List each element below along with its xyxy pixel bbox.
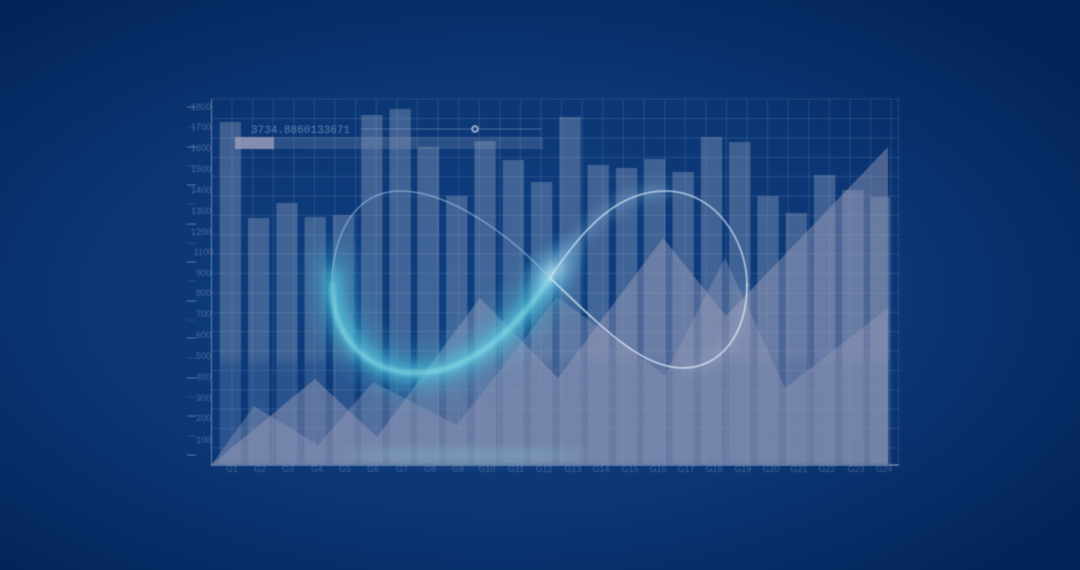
slider line (361, 128, 542, 130)
x axis labels (226, 464, 893, 474)
curve: lower right (550, 278, 747, 368)
y axis labels: 1800 (191, 102, 211, 112)
curve: upper left (332, 191, 550, 285)
x axis labels: G7 (396, 464, 408, 474)
y axis labels: 1200 (191, 227, 211, 237)
x axis labels: G3 (282, 464, 294, 474)
x axis labels: G12 (535, 464, 553, 474)
bar chart (220, 109, 890, 464)
curve: upper right (550, 191, 747, 285)
y axis labels: 600 (196, 330, 211, 340)
y axis labels: 900 (196, 268, 211, 278)
x axis labels: G5 (339, 464, 351, 474)
y axis labels: 300 (196, 393, 211, 403)
y axis labels: 1400 (191, 185, 211, 195)
x axis labels: G18 (705, 464, 723, 474)
area chart: back layer (212, 258, 888, 464)
x axis labels: G8 (424, 464, 436, 474)
y axis labels: 1100 (194, 247, 213, 257)
glow: crossing (502, 217, 604, 327)
y axis labels (191, 102, 213, 445)
glow: bottom right (683, 285, 747, 368)
y axis labels: 800 (196, 288, 211, 298)
glow: left lobe wide (334, 265, 550, 373)
x axis labels: G21 (790, 464, 808, 474)
y axis labels: 100 (196, 435, 211, 445)
y axis labels: 1500 (191, 164, 211, 174)
x axis labels: G2 (254, 464, 266, 474)
x axis labels: G6 (367, 464, 379, 474)
x axis labels: G20 (762, 464, 780, 474)
y axis ticks (187, 107, 196, 455)
value text: 3734.8860133671 (251, 125, 350, 137)
x axis labels: G10 (478, 464, 496, 474)
y axis labels: 700 (196, 309, 211, 319)
x axis labels: G1 (226, 464, 238, 474)
glow: left lobe bright (333, 275, 552, 373)
x axis labels: G4 (311, 464, 323, 474)
y axis labels: 200 (196, 413, 211, 423)
curve: lower left (332, 278, 550, 373)
area chart: front layer (212, 147, 888, 464)
x axis labels: G14 (592, 464, 610, 474)
chart grid (211, 99, 899, 465)
y axis labels: 1600 (191, 143, 211, 153)
x axis labels: G13 (564, 464, 582, 474)
x axis labels: G15 (621, 464, 639, 474)
progress fill (235, 137, 274, 149)
x axis labels: G24 (875, 464, 893, 474)
floor glow (340, 448, 590, 462)
y axis labels: 500 (196, 351, 211, 361)
slider readout (235, 125, 543, 149)
y axis labels: 400 (196, 372, 211, 382)
slider knob (472, 126, 478, 132)
chart (187, 99, 899, 474)
infinity symbol (332, 191, 747, 373)
x axis labels: G16 (649, 464, 667, 474)
axis lines (211, 99, 899, 465)
progress track (235, 137, 543, 149)
x axis labels: G11 (508, 464, 524, 474)
x axis labels: G17 (677, 464, 695, 474)
x axis labels: G9 (452, 464, 464, 474)
y axis labels: 1700 (191, 122, 211, 132)
x axis labels: G23 (847, 464, 865, 474)
y axis labels: 1300 (191, 206, 211, 216)
glow: right lobe (552, 191, 665, 275)
x axis labels: G19 (734, 464, 752, 474)
x axis labels: G22 (818, 464, 836, 474)
